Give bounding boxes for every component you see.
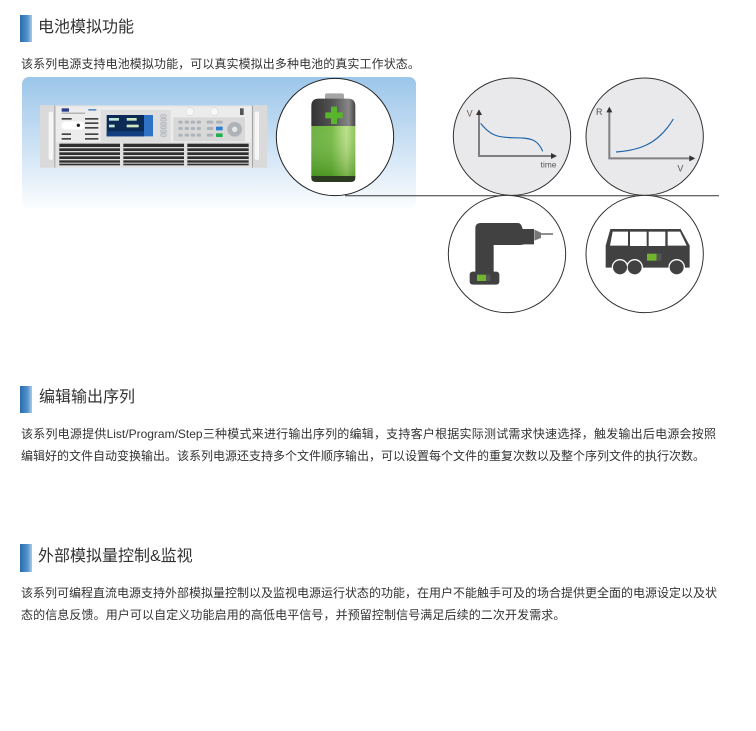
heading: external analog control and monitoring bbox=[20, 544, 193, 572]
chart: resistance over voltage: V bbox=[677, 164, 683, 174]
heading: battery simulation bbox=[20, 15, 134, 42]
panel: blue gradient background bbox=[22, 77, 416, 208]
heading: battery simulation: 电池模拟功能 bbox=[38, 19, 134, 36]
chart: voltage over time: V bbox=[467, 109, 473, 119]
chart: voltage over time bbox=[453, 78, 571, 195]
text: battery simulation intro: 该系列电源支持电池模拟功能，可以真实模拟出多种电池的真实工作状态。 bbox=[21, 57, 420, 71]
text: edit output sequence description bbox=[21, 427, 716, 463]
text: edit output sequence description: 编辑好的文件自动变换输出。该系列电源还支持多个文件顺序输出，可以设置每个文件的重复次数以及整个序列文件的执行次数。 bbox=[21, 449, 705, 463]
text: external analog control description: 态的信息反馈。用户可以自定义功能启用的高低电平信号，并预留控制信号满足后续的二次开发需求。 bbox=[21, 608, 566, 622]
connector line bbox=[345, 195, 719, 197]
heading: edit output sequence: 编辑输出序列 bbox=[39, 389, 135, 406]
text: external analog control description: 该系列可编程直流电源支持外部模拟量控制以及监视电源运行状态的功能，在用户不能触手可及的场合提供更全面的电源设定以及状 bbox=[21, 586, 717, 600]
heading: edit output sequence bbox=[20, 386, 135, 413]
heading: external analog control and monitoring: 外部模拟量控制&监视 bbox=[38, 548, 193, 565]
text: external analog control description bbox=[21, 586, 717, 622]
chart: voltage over time: time bbox=[541, 160, 557, 170]
chart: resistance over voltage bbox=[586, 78, 703, 195]
icon: power supply device bbox=[40, 105, 267, 168]
chart: resistance over voltage: R bbox=[596, 107, 603, 117]
text: edit output sequence description: 该系列电源提供List/Program/Step三种模式来进行输出序列的编辑，支持客户根据实际测试需求快速选择，触发输出后电源会按照 bbox=[21, 427, 716, 441]
icon: drill bbox=[448, 195, 566, 313]
icon: battery in circle bbox=[276, 78, 394, 196]
icon: bus bbox=[586, 195, 703, 313]
